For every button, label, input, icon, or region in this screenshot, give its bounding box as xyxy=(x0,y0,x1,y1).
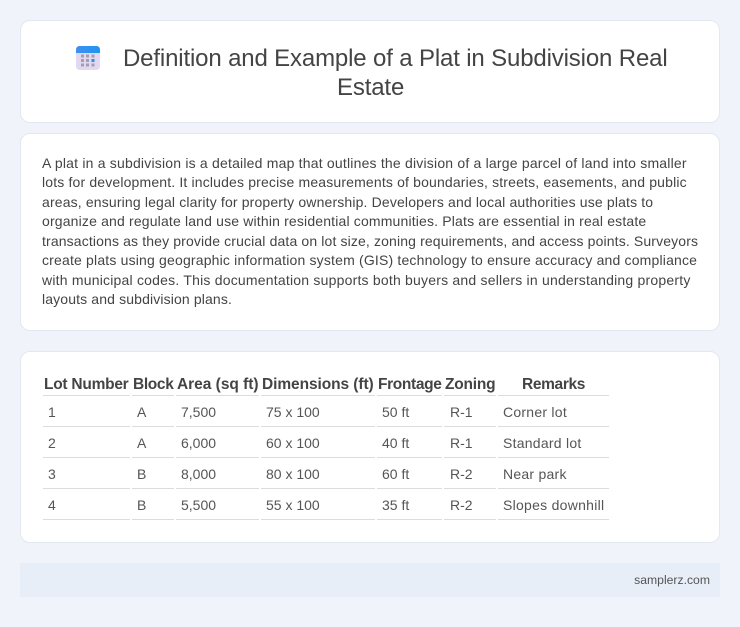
table header: Remarks xyxy=(522,376,585,393)
text block: plat description: layouts and subdivision plans. xyxy=(42,291,232,307)
text block: plat description: transactions as they provide crucial data on lot size, zoning requirements, and access points. Surveyors xyxy=(42,233,698,249)
table header: Frontage xyxy=(378,376,442,393)
table row 3: Near park xyxy=(503,466,567,482)
table row 2: 60 x 100 xyxy=(266,435,320,451)
text block: plat description: create plats using geographic information system (GIS) technology to ensure accuracy and compliance xyxy=(42,252,697,268)
icon: calendar xyxy=(76,46,100,70)
table row 3: 3 xyxy=(48,466,56,482)
text block: plat description: with municipal codes. This documentation supports both buyers and sellers in understanding property xyxy=(42,272,691,288)
table header: Block xyxy=(133,376,173,393)
table row 4: 55 x 100 xyxy=(266,497,320,513)
table row 2: 6,000 xyxy=(181,435,216,451)
table header: Lot Number xyxy=(44,376,128,393)
table row 4 xyxy=(48,497,604,513)
text block: plat description: lots for development. It includes precise measurements of boundaries, streets, easements, and public xyxy=(42,174,687,190)
table row 3: 8,000 xyxy=(181,466,216,482)
title: Definition and Example of a Plat in Subdivision Real xyxy=(123,45,668,72)
table row 1: 1 xyxy=(48,404,56,420)
table row 2: Standard lot xyxy=(503,435,582,451)
table header: Zoning xyxy=(445,376,495,393)
text block: plat description: organize and regulate land use within residential communities. Plats are essential in real estate xyxy=(42,213,646,229)
table row 3: B xyxy=(137,466,146,482)
title xyxy=(123,45,668,101)
text block: plat description: areas, ensuring legal clarity for property ownership. Developers and local authorities use plats to xyxy=(42,194,653,210)
table row 4: Slopes downhill xyxy=(503,497,604,513)
table row 1: 7,500 xyxy=(181,404,216,420)
table row 3: 80 x 100 xyxy=(266,466,320,482)
table row 3: R-2 xyxy=(450,466,473,482)
table header: Dimensions (ft) xyxy=(262,376,374,393)
panel: title card xyxy=(20,20,720,123)
table row 1 xyxy=(48,404,567,420)
table row 1: 75 x 100 xyxy=(266,404,320,420)
table row 4: 35 ft xyxy=(382,497,409,513)
table row 2: A xyxy=(137,435,146,451)
table row 1: Corner lot xyxy=(503,404,567,420)
text block: plat description xyxy=(42,155,698,307)
footer text: samplerz.com xyxy=(634,573,710,587)
table header xyxy=(44,376,585,393)
panel: description card xyxy=(20,133,720,331)
panel: table card xyxy=(20,351,720,543)
table row 1: A xyxy=(137,404,146,420)
table header: Area (sq ft) xyxy=(177,376,259,393)
table row 4: B xyxy=(137,497,146,513)
table row 3: 60 ft xyxy=(382,466,409,482)
table row 3 xyxy=(48,466,567,482)
table row 2: R-1 xyxy=(450,435,473,451)
table row 4: 4 xyxy=(48,497,56,513)
table row 4: R-2 xyxy=(450,497,473,513)
table row 2 xyxy=(48,435,582,451)
footer bar xyxy=(20,563,720,597)
text block: plat description: A plat in a subdivision is a detailed map that outlines the division of a large parcel of land into smaller xyxy=(42,155,687,171)
table row 1: 50 ft xyxy=(382,404,409,420)
table row 2: 2 xyxy=(48,435,56,451)
table row 2: 40 ft xyxy=(382,435,409,451)
table row 1: R-1 xyxy=(450,404,473,420)
title: Estate xyxy=(337,74,404,101)
table row 4: 5,500 xyxy=(181,497,216,513)
table: lot data xyxy=(43,376,609,520)
